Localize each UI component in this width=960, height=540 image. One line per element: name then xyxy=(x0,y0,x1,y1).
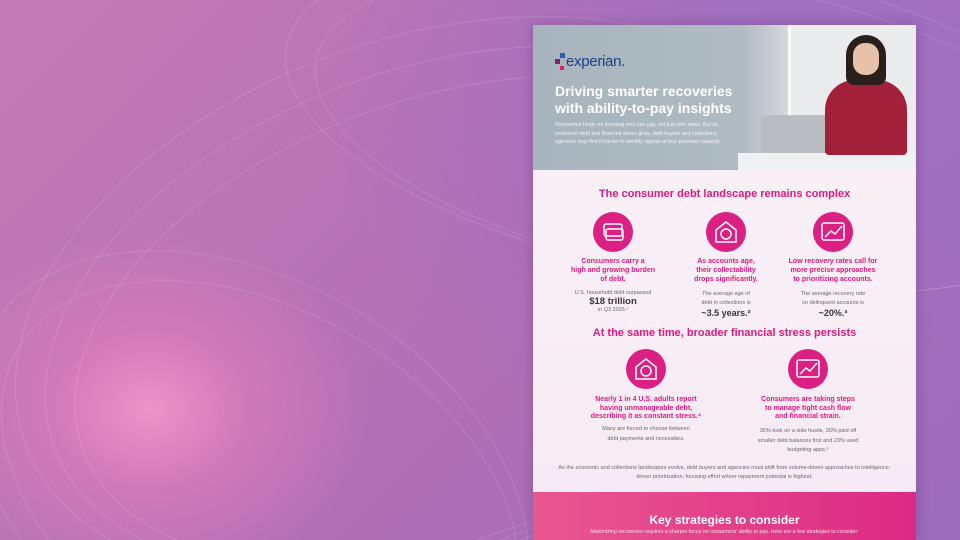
strategies band xyxy=(533,492,916,540)
stat 5: Consumers are taking steps xyxy=(761,396,855,403)
stat 3: to prioritizing accounts. xyxy=(793,276,873,283)
stat 5: to manage tight cash flow xyxy=(765,405,851,412)
stat 2 xyxy=(694,258,758,318)
strategies band: Key strategies to consider xyxy=(649,513,800,527)
stat 5: budgeting apps.⁵ xyxy=(787,447,829,453)
stat 2: their collectability xyxy=(696,267,756,274)
logo: experian. xyxy=(566,53,625,70)
heading 2: At the same time, broader financial stress persists xyxy=(593,327,856,339)
heading 1: The consumer debt landscape remains complex xyxy=(599,188,850,200)
photo: desk xyxy=(738,153,916,170)
stat 1: U.S. household debt surpassed xyxy=(575,290,651,296)
icon: credit card xyxy=(593,212,633,252)
stat 4: Many are forced to choose between xyxy=(602,426,690,432)
title: with ability-to-pay insights xyxy=(555,100,732,116)
stat 3: on delinquent accounts is xyxy=(802,300,864,306)
title xyxy=(555,83,732,116)
stat 5: smaller debt balances first and 23% used xyxy=(758,438,858,444)
header photo panel xyxy=(533,25,916,170)
stat 4 xyxy=(591,396,701,442)
stat 1: high and growing burden xyxy=(571,267,655,274)
stat 5: and financial strain. xyxy=(775,413,841,420)
stat 4: debt payments and necessities. xyxy=(607,436,685,442)
stat 3: Low recovery rates call for xyxy=(789,258,877,265)
stat 2: As accounts age, xyxy=(697,258,755,265)
photo: person xyxy=(825,80,907,155)
strategies band: Maximizing recoveries requires a sharper focus on consumers' ability to pay. Here are a few strategies to consider: xyxy=(590,529,859,535)
stat 2: The average age of xyxy=(702,291,750,297)
stat 4: Nearly 1 in 4 U.S. adults report xyxy=(595,396,697,403)
stat 3: ~20%.³ xyxy=(819,308,847,318)
title: Driving smarter recoveries xyxy=(555,83,732,99)
stat 2: drops significantly. xyxy=(694,276,758,283)
stat 5 xyxy=(758,396,858,453)
icon: chart xyxy=(813,212,853,252)
document xyxy=(533,25,916,540)
intro text: Recoveries hinge on knowing who can pay, not just who owes. But as consumer debt and financial stress grow, debt buyers and collections agencies may find it harder to identify signals of true payment capacity. xyxy=(555,122,721,145)
closing paragraph: As the economic and collections landscapes evolve, debt buyers and agencies must shift from volume-driven approaches to intelligence-driven prioritization, focusing effort where repayment potential is highest. xyxy=(558,465,891,480)
stat 1 xyxy=(571,258,655,313)
photo: laptop xyxy=(761,115,833,160)
stat 1: in Q3 2025.¹ xyxy=(598,307,628,313)
stat 4: describing it as constant stress.⁴ xyxy=(591,413,701,420)
stat 2: ~3.5 years.² xyxy=(701,308,751,318)
stat 3 xyxy=(789,258,878,318)
photo: shelves xyxy=(788,25,916,120)
stat 1: Consumers carry a xyxy=(581,258,645,265)
stat 4: having unmanageable debt, xyxy=(600,405,692,412)
stat 3: The average recovery rate xyxy=(801,291,865,297)
icon: chart 2 xyxy=(788,349,828,389)
icon: house dollar 2 xyxy=(626,349,666,389)
stat 1: $18 trillion xyxy=(589,296,637,307)
stat 2: debt in collections is xyxy=(701,300,751,306)
icon: house dollar xyxy=(706,212,746,252)
stat 1: of debt. xyxy=(600,276,626,283)
stat 3: more precise approaches xyxy=(791,267,875,274)
stat 5: 36% took on a side hustle, 26% paid off xyxy=(760,428,856,434)
